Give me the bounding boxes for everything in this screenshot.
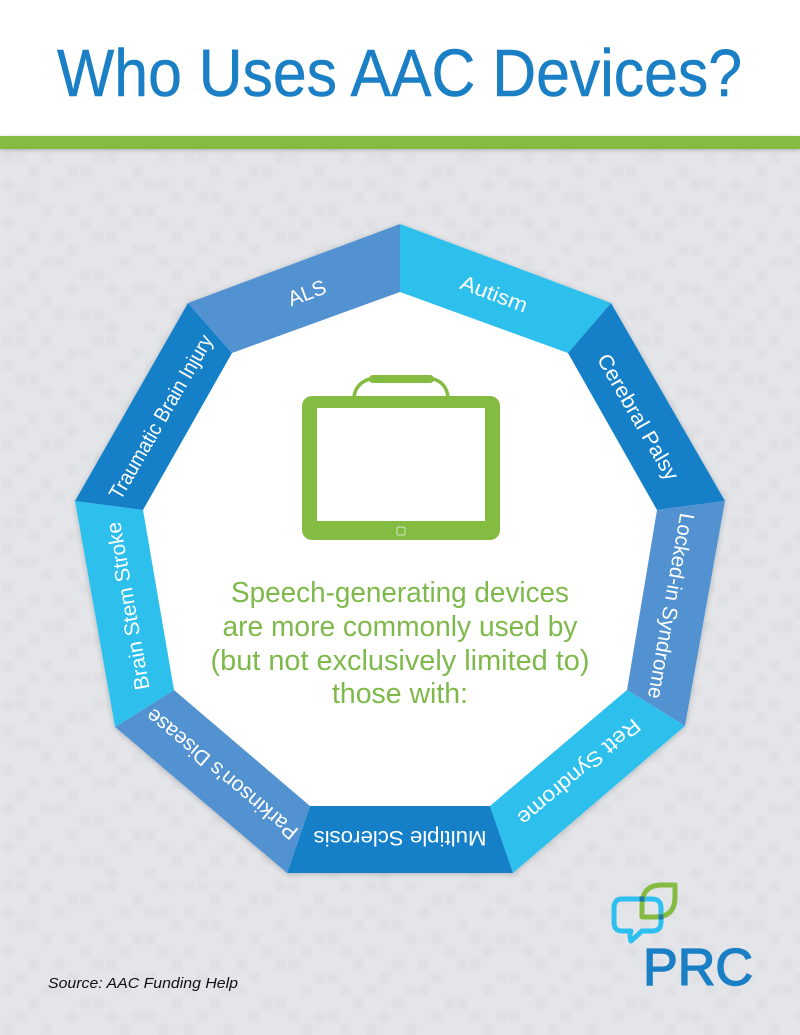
segment: Locked-in Syndrome [627,501,725,726]
text block: description: (but not exclusively limited to) [210,645,590,677]
text block: description [210,577,590,710]
segment: Brain Stem Stroke [75,501,174,727]
segment: Rett Syndrome [490,690,685,873]
icon: tablet with handle [302,375,500,540]
panel: condition ring [75,224,725,873]
text block: description: those with: [332,678,468,710]
segment: Cerebral Palsy [568,303,725,510]
overlap marks [640,896,664,920]
source note: Source: AAC Funding Help [48,975,238,992]
segment: Multiple Sclerosis: Multiple Sclerosis [314,826,486,849]
segment: Traumatic Brain Injury: Traumatic Brain Injury [105,331,218,504]
wordmark: PRC [643,939,753,997]
text block: description: are more commonly used by [222,611,578,643]
text block: description: Speech-generating devices [231,577,569,609]
segment: Brain Stem Stroke: Brain Stem Stroke [102,520,155,692]
segment: ALS [188,224,400,353]
segment: Parkinson's Disease: Parkinson's Disease [142,703,303,844]
icon: leaf [642,885,675,917]
ring interior [75,224,725,873]
segment: Rett Syndrome: Rett Syndrome [513,714,645,830]
segment: Autism: Autism [457,271,531,317]
green divider bar [0,136,800,149]
icon: speech bubble [614,899,661,941]
segment: Cerebral Palsy: Cerebral Palsy [592,350,683,485]
segment: Multiple Sclerosis [287,806,513,873]
segment: Parkinson's Disease [115,690,310,873]
segment: ALS: ALS [285,276,329,311]
segment: Autism [400,224,611,353]
segment: Locked-in Syndrome: Locked-in Syndrome [643,511,698,700]
header band [0,0,800,136]
title: Who Uses AAC Devices? [57,36,742,111]
logo: PRC [614,885,753,997]
